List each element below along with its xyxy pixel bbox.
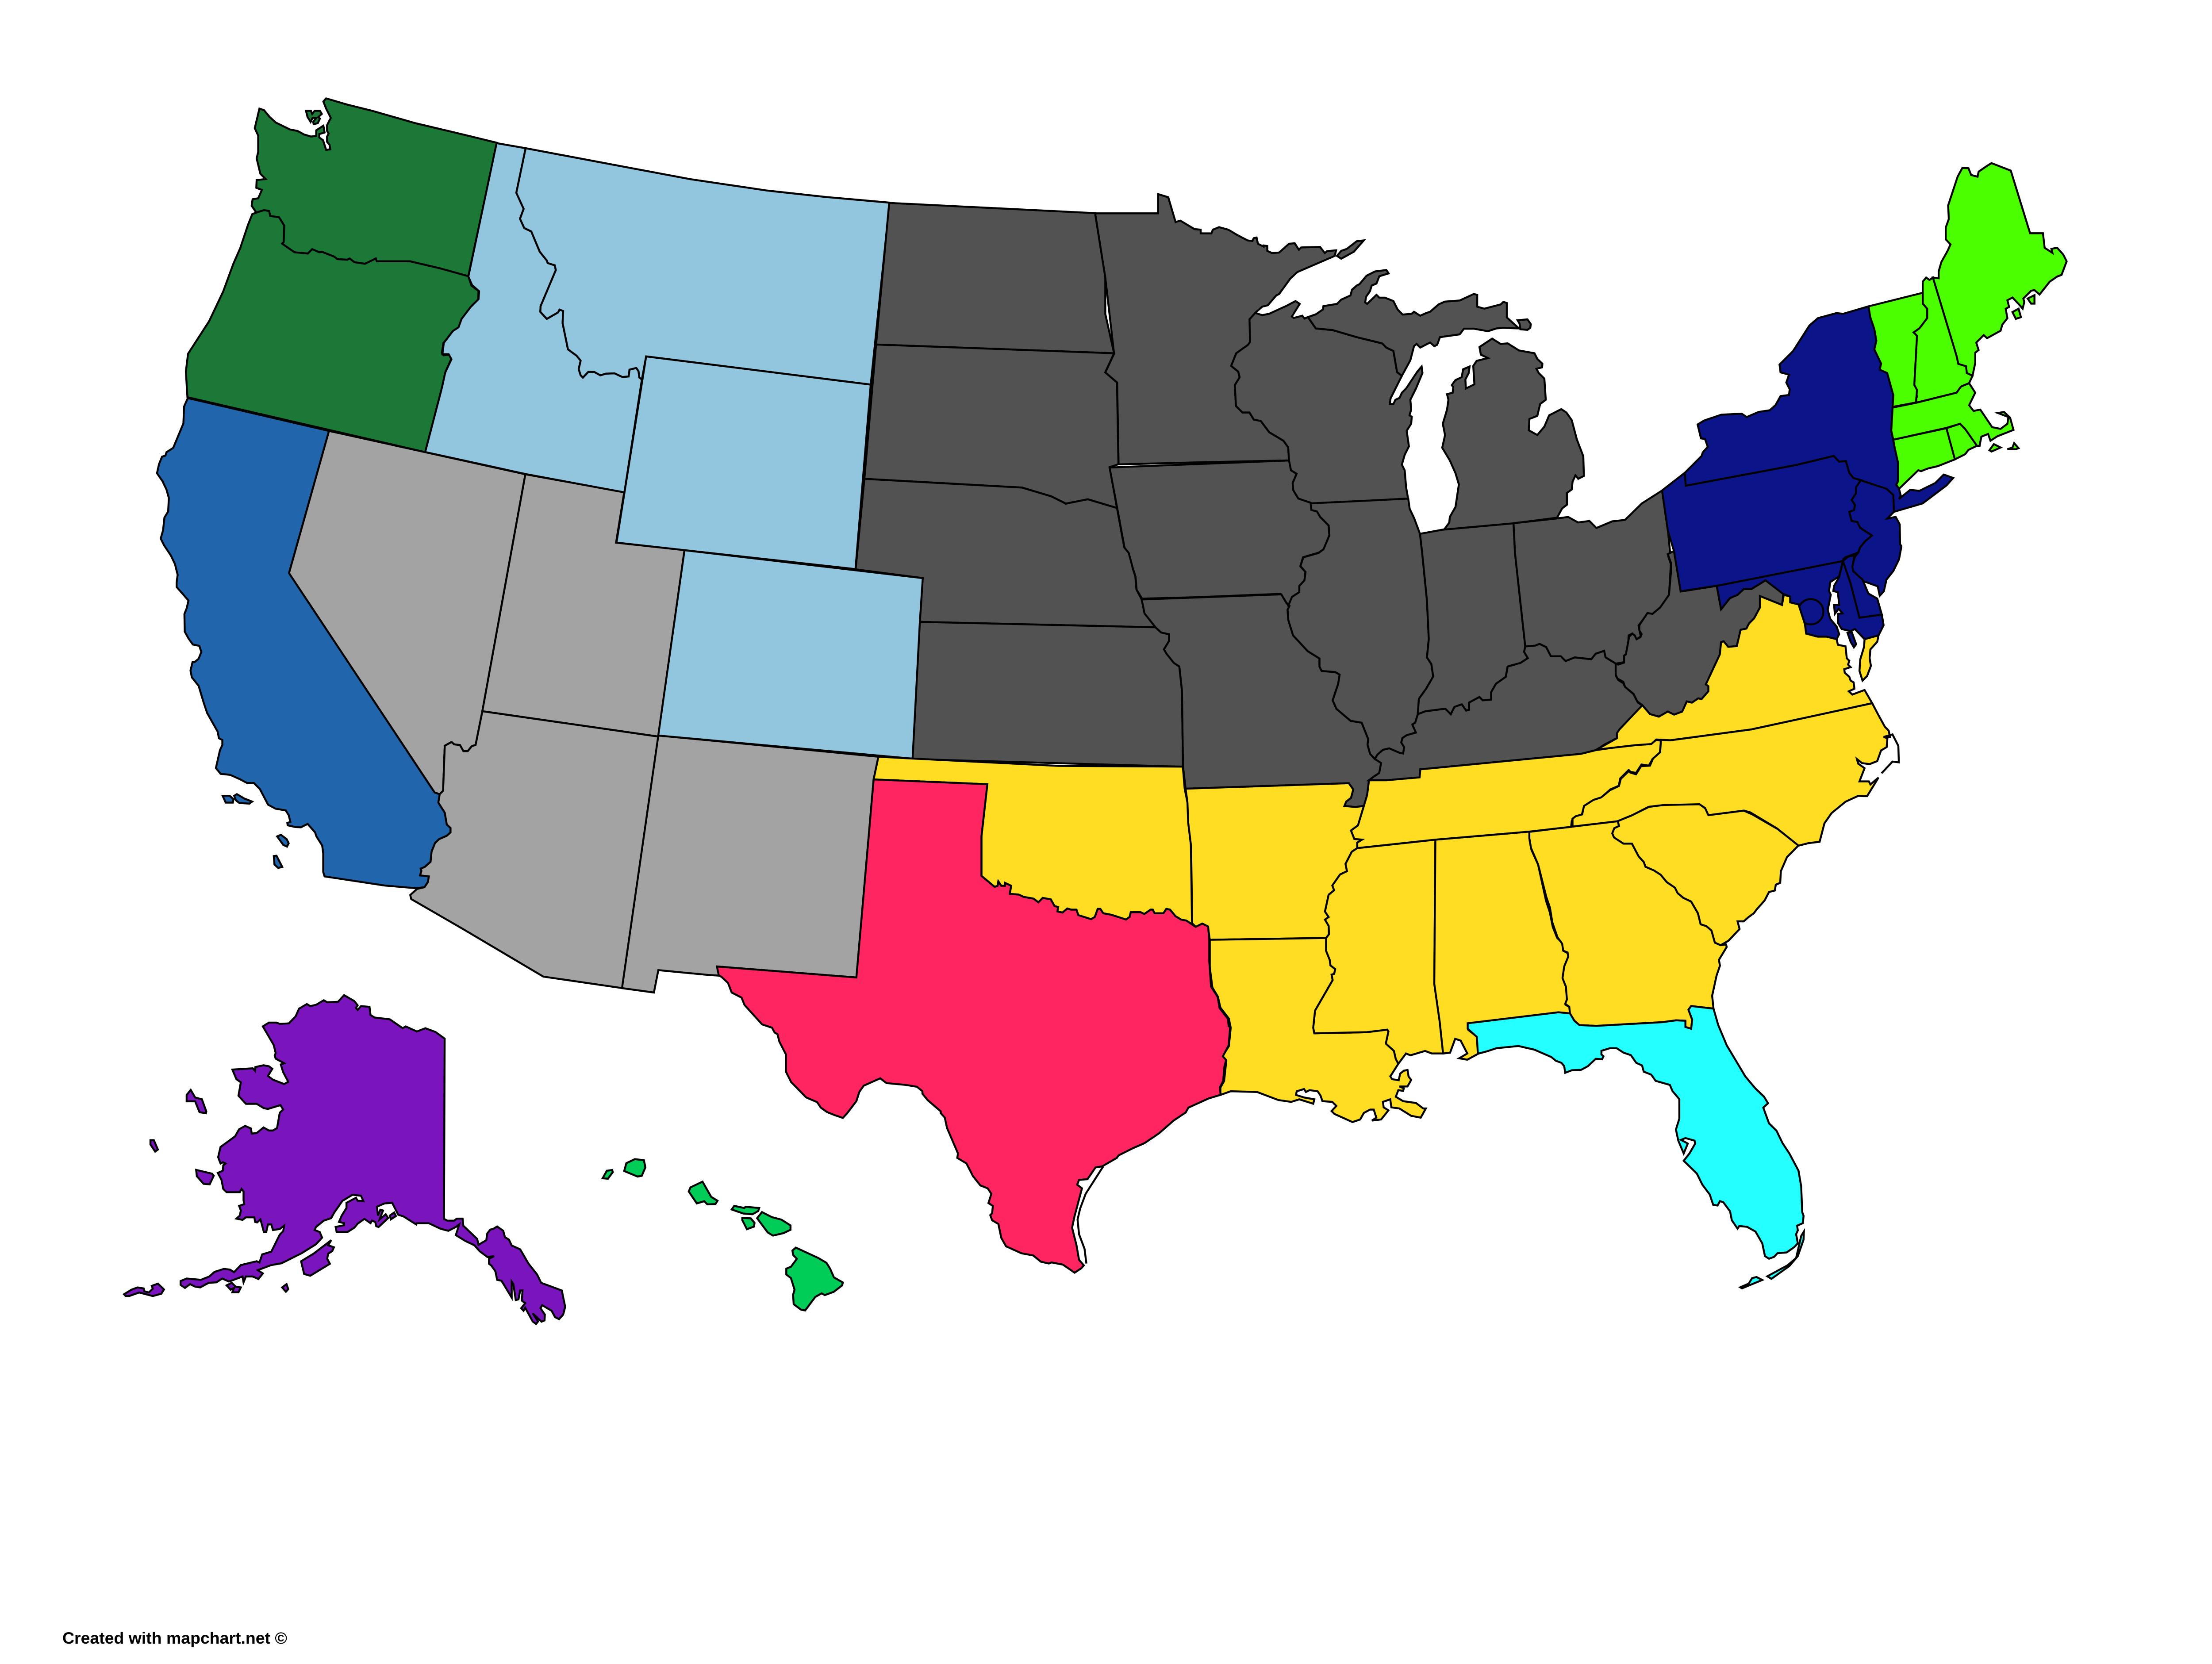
islands: San Juan (306, 111, 322, 124)
state: Arizona (410, 711, 658, 988)
state: Maryland east (1833, 561, 1884, 639)
island: Maui (757, 1212, 791, 1235)
state: West Virginia (1616, 551, 1783, 717)
state: Wyoming (617, 357, 871, 569)
state: Florida (1468, 1006, 1804, 1259)
state: Alabama (1434, 832, 1571, 1060)
state: Kentucky (1369, 644, 1644, 780)
state: Pennsylvania (1662, 456, 1872, 591)
state: Ohio (1513, 491, 1671, 663)
state: New Hampshire (1914, 278, 1973, 403)
region: Hawaii (green) (603, 1159, 843, 1311)
island: Niihau (603, 1170, 613, 1179)
state: Tennessee (1351, 740, 1661, 848)
state: Kansas (913, 622, 1183, 767)
island: Isle Royale (1337, 241, 1364, 259)
islands: lower Keys (1740, 1277, 1762, 1288)
state: Maine (1933, 163, 2066, 376)
barrier island: Outer Banks (1882, 734, 1899, 773)
state: Texas (717, 779, 1230, 1273)
island: Mount Desert (2012, 309, 2021, 319)
islands: upper Keys (1767, 1231, 1804, 1279)
state: Alaska mainland (180, 995, 565, 1324)
island: Kodiak (301, 1240, 334, 1276)
island: Nantucket (2007, 443, 2019, 449)
state: New York (1685, 307, 1953, 512)
region: California (blue) (157, 398, 450, 888)
region: Alaska (purple) (124, 995, 565, 1324)
island: Santa Catalina (277, 835, 289, 847)
state: Indiana (1418, 523, 1528, 714)
state: Virginia eastern shore (1859, 636, 1878, 681)
state: Illinois (1287, 498, 1433, 759)
state: Missouri (1141, 594, 1381, 807)
state: Connecticut (1893, 428, 1955, 489)
region: New England (bright green) (1869, 163, 2066, 489)
credit: mapchart attribution: Created with mapchart.net © (62, 1629, 287, 1647)
state: Massachusetts (1891, 383, 2013, 446)
state: Montana (516, 148, 890, 385)
region: South (yellow) (874, 595, 1899, 1122)
state: Michigan lower peninsula (1442, 338, 1584, 529)
island: Lanai (742, 1218, 755, 1229)
state: Idaho (425, 143, 642, 492)
island: Nunivak (196, 1170, 214, 1185)
state: Delaware (1843, 556, 1882, 617)
state: Virginia (1597, 595, 1872, 750)
region: Texas (crimson) (717, 779, 1230, 1273)
island: Deer Isle (2028, 295, 2035, 303)
state: Mississippi (1313, 840, 1443, 1064)
state: Rhode Island (1947, 424, 1977, 460)
state: Washington (252, 98, 497, 276)
region: Pacific Northwest (dark green) (186, 98, 497, 452)
island: San Clemente (274, 856, 282, 868)
island: Unimak group (124, 1284, 164, 1296)
state: Nevada (289, 431, 525, 794)
state: California (157, 398, 450, 888)
state: Oregon (186, 210, 479, 452)
island: Hawaii (786, 1248, 843, 1311)
island: Chirikof (282, 1284, 288, 1292)
island: St. Lawrence (187, 1090, 206, 1113)
region: Mountain West (light blue) (425, 143, 923, 759)
region: Northeast corridor (navy) (1662, 307, 1953, 648)
region: Florida (cyan) (1468, 1006, 1804, 1288)
state: New Jersey (1849, 480, 1901, 596)
state: Utah (482, 474, 684, 736)
island: Shumagin (227, 1283, 241, 1292)
marker: District of Columbia circle (1798, 599, 1824, 625)
island: San Miguel (223, 796, 234, 803)
state: Wisconsin (1231, 301, 1422, 504)
island: Oahu (689, 1181, 718, 1204)
state: Oklahoma (874, 757, 1192, 924)
island: Molokai (732, 1206, 759, 1214)
island: St. Matthew (150, 1140, 158, 1152)
barrier island: Padre (1078, 1166, 1103, 1264)
island: Santa Cruz (234, 794, 252, 804)
state: Georgia (1529, 821, 1727, 1029)
region: Southwest (grey) (289, 431, 879, 993)
state: South Carolina (1612, 804, 1798, 945)
state: Michigan upper peninsula (1308, 270, 1519, 376)
island: Drummond (1517, 319, 1531, 330)
island: Martha's Vineyard (1989, 444, 2001, 452)
state: Colorado (658, 550, 923, 759)
state: Arkansas (1186, 783, 1364, 940)
state: Vermont (1869, 293, 1927, 407)
state: Iowa (1110, 460, 1329, 606)
state: North Carolina (1573, 703, 1890, 846)
island: Chesapeake fragment (1847, 633, 1856, 648)
region: Midwest (dark grey) (856, 194, 1783, 807)
state: North Dakota (876, 203, 1114, 353)
state: New Mexico (622, 736, 879, 993)
state: Maryland west (1717, 561, 1843, 639)
state: South Dakota (864, 345, 1118, 508)
state: Minnesota (1095, 194, 1336, 464)
island: Montague (390, 1212, 396, 1219)
state: Louisiana (1210, 938, 1426, 1122)
island: Kauai (624, 1159, 645, 1177)
state: Nebraska (856, 479, 1156, 627)
